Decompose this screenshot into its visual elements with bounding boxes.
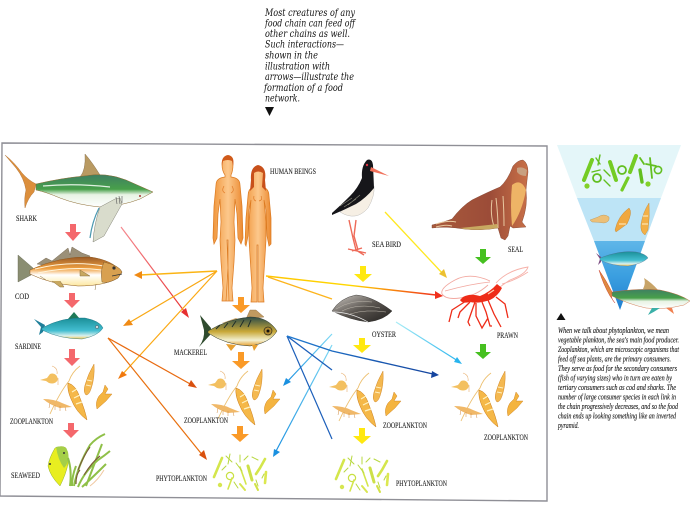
icon: prawn: [442, 267, 528, 328]
label: human beings: HUMAN BEINGS: [270, 166, 316, 176]
panel: food network frame: [0, 143, 547, 501]
pyramid diagram: [557, 145, 690, 315]
label: sea bird: SEA BIRD: [372, 239, 401, 249]
intro text: formation of a food: [263, 83, 343, 94]
icon: down triangle marker: [265, 107, 274, 116]
label: phytoplankton (centre left): PHYTOPLANKTON: [156, 473, 207, 483]
block arrows: green chain: [475, 249, 491, 359]
label: zooplankton (right): ZOOPLANKTON: [484, 432, 528, 442]
icon: zooplankton (right): [451, 371, 523, 427]
icon: cod: [18, 247, 122, 290]
arrow: sardine to zooplankton: [108, 338, 197, 388]
icon: sea bird: [332, 160, 389, 255]
arrow: oyster to right zooplankton: [396, 322, 462, 364]
label: seal: SEAL: [508, 244, 523, 254]
label: shark: SHARK: [16, 213, 38, 223]
arrow: mackerel to centre-right zooplankton: [287, 336, 332, 370]
label: sardine: SARDINE: [15, 341, 41, 351]
arrow: sea bird to prawn: [385, 212, 447, 278]
pyramid: zooplankton band: [577, 198, 661, 241]
intro text: [263, 8, 356, 104]
arrow: shark to mackerel: [121, 227, 189, 318]
label: zooplankton (centre right): ZOOPLANKTON: [383, 420, 427, 430]
arrow: sardine to phytoplankton: [108, 338, 207, 460]
arrow: humans to cod: [134, 271, 217, 279]
icon: sardine: [34, 312, 103, 339]
explanatory paragraph: pyramid.: [557, 421, 579, 430]
block arrows: yellow chain: [353, 266, 372, 444]
icon: up triangle marker: [556, 313, 566, 320]
pyramid: small fish band: [594, 241, 645, 310]
arrow: mackerel to centre-right phytoplankton: [287, 336, 332, 439]
label: mackerel: MACKEREL: [174, 347, 207, 357]
icon: oyster: [332, 295, 392, 322]
arrow: mackerel to right zooplankton: [287, 336, 439, 378]
icon: phytoplankton (centre left): [214, 454, 266, 490]
label: phytoplankton (centre right): PHYTOPLANKTON: [396, 478, 447, 488]
pyramid: phytoplankton icons: [584, 155, 662, 190]
icon: phytoplankton (centre right): [336, 456, 388, 492]
arrow: humans to oyster: [268, 277, 332, 299]
pyramid: shark: [599, 270, 690, 315]
arrow: oyster to centre zooplankton: [283, 334, 332, 386]
icon: zooplankton (left): [40, 364, 112, 420]
icon: shark: [5, 154, 153, 242]
intro text: other chains as well.: [265, 29, 350, 40]
label: zooplankton (centre left): ZOOPLANKTON: [184, 415, 228, 425]
intro text: Most creatures of any: [264, 8, 355, 19]
icon: zooplankton (centre left): [208, 369, 280, 425]
icon: seaweed: [48, 434, 110, 487]
intro text: illustration with: [265, 61, 330, 72]
arrow: humans to zooplankton: [118, 271, 217, 379]
icon: mackerel: [199, 310, 277, 351]
pyramid: zooplankton icons: [590, 203, 649, 235]
label: oyster: OYSTER: [372, 329, 396, 339]
intro text: food chain can feed off: [264, 18, 356, 30]
label: cod: COD: [15, 291, 29, 301]
icon: zooplankton (centre right): [329, 371, 401, 427]
explanatory paragraph: [557, 326, 679, 430]
label: zooplankton (left): ZOOPLANKTON: [10, 416, 53, 426]
label: prawn: PRAWN: [497, 330, 518, 340]
icon: human beings: [213, 155, 271, 302]
intro text: arrows—illustrate the: [265, 72, 354, 83]
intro text: network.: [265, 93, 300, 104]
icon: seal: [432, 160, 528, 240]
pyramid: phytoplankton band: [557, 145, 681, 198]
intro text: Such interactions—: [265, 40, 344, 51]
label: seaweed: SEAWEED: [11, 470, 40, 480]
arrow: oyster to phytoplankton: [273, 345, 332, 457]
block arrows: red chain: [63, 224, 81, 438]
arrow: humans to prawn: [266, 276, 443, 299]
pyramid: sardine: [596, 252, 648, 266]
intro text: shown in the: [265, 50, 318, 61]
block arrows: orange chain: [231, 297, 250, 442]
arrow: humans to sardine: [123, 271, 217, 326]
